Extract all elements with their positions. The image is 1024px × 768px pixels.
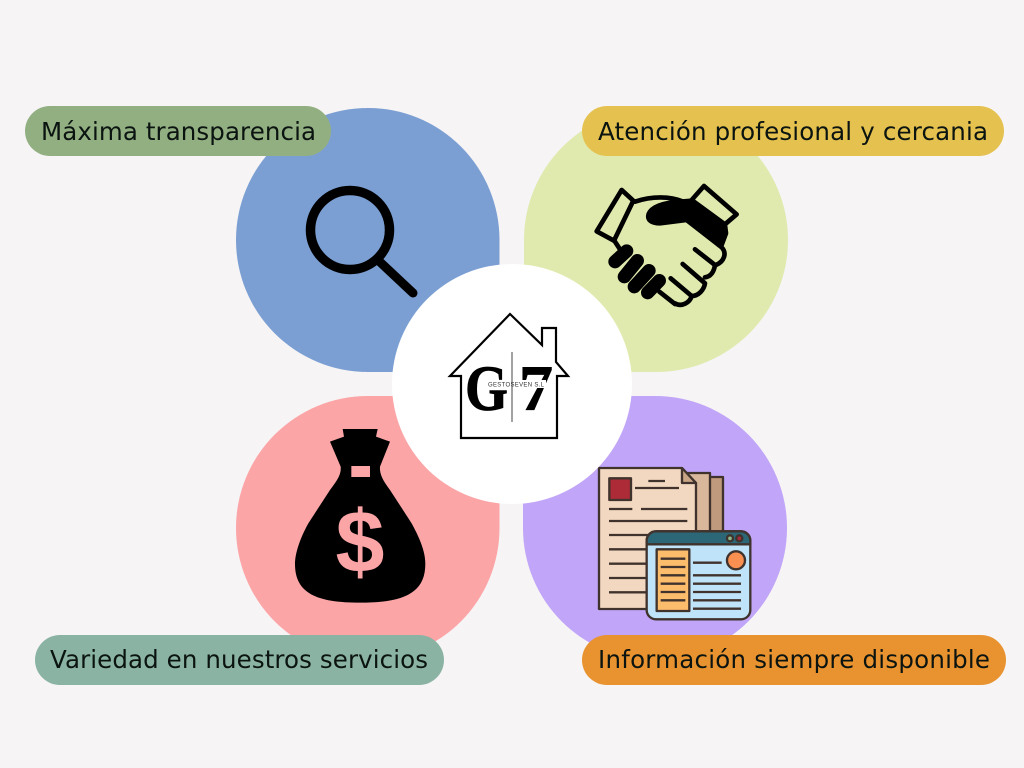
label: Información siempre disponible: Información siempre disponible xyxy=(598,645,990,674)
panel: blue petal xyxy=(236,108,500,372)
label: Máxima transparencia xyxy=(25,106,331,156)
icon: magnifying glass xyxy=(310,190,413,293)
dollar sign: $ xyxy=(336,492,384,591)
label: Máxima transparencia: Máxima transparencia xyxy=(41,117,316,146)
logo: G7 house: GESTOSEVEN S.L xyxy=(488,382,545,388)
icon: money bag xyxy=(295,429,425,603)
center circle xyxy=(392,264,632,504)
label: Atención profesional y cercania xyxy=(582,106,1004,156)
logo: G7 house: 7 xyxy=(519,353,553,425)
logo: G7 house: G xyxy=(465,353,508,425)
label: Variedad en nuestros servicios xyxy=(35,635,444,685)
label: Información siempre disponible xyxy=(582,635,1006,685)
panel: green petal xyxy=(524,108,788,372)
label: Atención profesional y cercania: Atención profesional y cercania xyxy=(598,117,988,146)
panel: pink petal xyxy=(236,396,500,660)
panel: purple petal xyxy=(523,396,787,660)
label: Variedad en nuestros servicios: Variedad en nuestros servicios xyxy=(50,645,428,674)
logo: G7 house xyxy=(450,314,568,438)
icon: handshake xyxy=(597,186,737,305)
icon: documents and browser window xyxy=(599,468,750,619)
